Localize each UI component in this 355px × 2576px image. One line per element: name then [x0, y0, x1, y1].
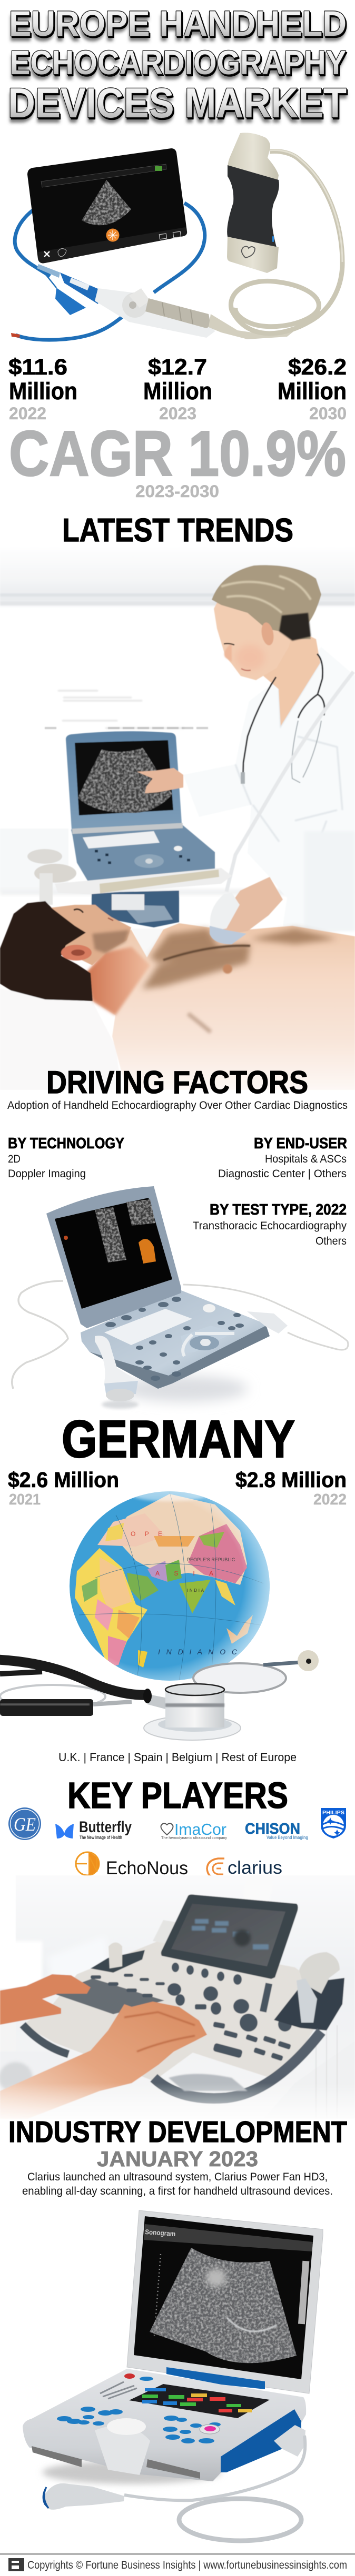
- image: handheld tablet ultrasound with probe and cable: [11, 133, 342, 340]
- console handle: [23, 2025, 321, 2098]
- globe: PEOPLE'S REPUBLIC: [187, 1557, 235, 1562]
- segment: by technology: 2D: [8, 1153, 21, 1165]
- tablet: [27, 148, 187, 263]
- device monitor: [127, 2210, 323, 2393]
- cart: [27, 849, 232, 927]
- globe: INDIA: [187, 1588, 204, 1593]
- segment: by technology: BY TECHNOLOGY: [8, 1135, 124, 1152]
- stat: Germany 2021: $2.6 Million: [8, 1468, 119, 1492]
- catheter handle: [37, 264, 215, 338]
- laptop probes: [95, 1311, 288, 1409]
- stat: 2030 market size: Million: [278, 378, 347, 405]
- segment: by test type: Transthoracic Echocardiography: [193, 1220, 347, 1232]
- operator right hand and arm: [0, 2002, 207, 2119]
- stat: 2023 market size: [143, 355, 212, 423]
- patient torso: [86, 923, 355, 1090]
- segment: by end-user: Diagnostic Center | Others: [218, 1168, 347, 1180]
- device buttons: [57, 2373, 221, 2443]
- globe: I N D I A N O C: [158, 1648, 238, 1656]
- globe: A S I A: [155, 1570, 213, 1577]
- stat: 2022 market size: [8, 355, 77, 423]
- ultrasound monitor: [66, 731, 183, 830]
- segment: by test type: [193, 1201, 347, 1247]
- logo: Fortune Business Insights: [8, 2558, 24, 2571]
- photo: doctor scanning patient with ultrasound cart: [0, 544, 355, 1090]
- logo: ImaCor: ImaCor: [174, 1820, 226, 1838]
- stat: Germany 2021: 2021: [9, 1491, 41, 1508]
- photo: hands operating ultrasound console: [0, 1875, 355, 2119]
- text: date: JANUARY 2023: [97, 2147, 258, 2171]
- device probe and cable: [43, 2436, 305, 2541]
- device side panel: [221, 2409, 305, 2472]
- segment: by technology: Doppler Imaging: [8, 1168, 86, 1180]
- handheld beige probe: [209, 133, 342, 339]
- text: development description: [22, 2171, 333, 2197]
- segment: by technology: [8, 1135, 124, 1180]
- logo: Butterfly: [55, 1819, 132, 1840]
- text: latest trends subtitle: Emergence of Ultrasound in Telehealth: [87, 549, 268, 561]
- stat: 2022 market size: Million: [9, 378, 77, 405]
- stat: 2030 market size: [278, 355, 347, 423]
- blue catheter cable: [11, 203, 205, 340]
- logo: EchoNous: [76, 1852, 188, 1878]
- logo: GE: GE: [14, 1814, 36, 1835]
- stat: 2022 market size: 2022: [9, 404, 46, 423]
- laptop cables: [12, 1281, 348, 1389]
- image: portable laptop ultrasound: [12, 1186, 348, 1409]
- stat: Germany 2022: $2.8 Million: [235, 1468, 347, 1492]
- logo: Butterfly: Butterfly: [79, 1819, 132, 1836]
- text: other European countries: U.K. | France | Spain | Belgium | Rest of Europe: [58, 1751, 297, 1764]
- console keyboard: [52, 1978, 164, 2014]
- stat: 2030 market size: 2030: [309, 404, 347, 423]
- stat: 2022 market size: $11.6: [8, 355, 67, 380]
- console knobs and buttons: [91, 1963, 292, 2061]
- logo: Clarius: clarius: [228, 1858, 282, 1878]
- patient pillow: [0, 928, 163, 1090]
- console touchscreen: [161, 1894, 298, 1979]
- image: globe with stethoscope: [0, 1489, 319, 1740]
- text: driving factors subtitle: Adoption of Handheld Echocardiography Over Other Cardiac Diagnostics: [7, 1099, 348, 1112]
- text: development description: enabling all-day scanning, a first for handheld ultrasound devices.: [22, 2185, 333, 2197]
- heading: Germany: GERMANY: [62, 1410, 295, 1469]
- operator left hand: [0, 1974, 91, 2025]
- globe: O P E: [131, 1530, 162, 1538]
- logo: ImaCor: The hemodynamic ultrasound company: [161, 1835, 227, 1840]
- text: development description: Clarius launched an ultrasound system, Clarius Power Fan HD3,: [27, 2171, 328, 2183]
- device monitor: Sonogram: [145, 2228, 176, 2238]
- logo: Chison: Value Beyond Imaging: [267, 1835, 308, 1841]
- room background: [0, 1875, 355, 2119]
- device colour display: [129, 2384, 270, 2418]
- segment: by end-user: [218, 1135, 347, 1180]
- laptop lid and screen: [46, 1186, 181, 1328]
- clinic background: [0, 544, 355, 895]
- device hinge: [166, 2367, 265, 2389]
- title: [8, 4, 347, 126]
- stat: 2030 market size: $26.2: [288, 355, 347, 380]
- segment: by end-user: Hospitals & ASCs: [265, 1153, 347, 1165]
- logo: Chison: CHISON: [245, 1821, 300, 1837]
- stat: 2023 market size: Million: [143, 378, 212, 405]
- image: portable sonogram device: [23, 2210, 323, 2541]
- heading: key players: KEY PLAYERS: [67, 1775, 288, 1816]
- logo: GE: [8, 1807, 41, 1840]
- device base: [23, 2369, 306, 2484]
- globe: [70, 1489, 270, 1681]
- console left probe holder: [91, 1942, 145, 1973]
- stethoscope: [0, 1650, 319, 1740]
- logo: Philips: [321, 1808, 346, 1838]
- doctor hand on probe: [210, 877, 283, 944]
- stat: Germany 2021: [8, 1468, 119, 1508]
- stat: 2023 market size: 2023: [159, 404, 196, 423]
- doctor coat: [183, 647, 355, 932]
- heading: driving factors: DRIVING FACTORS: [46, 1065, 308, 1100]
- logo: EchoNous: EchoNous: [106, 1858, 188, 1878]
- stat: Germany 2022: [235, 1468, 347, 1508]
- doctor head: [212, 565, 321, 726]
- logo: Butterfly: The New Image of Health: [80, 1835, 122, 1840]
- stethoscope on doctor: [226, 654, 353, 892]
- footer: [0, 2553, 355, 2571]
- stat: 2023 market size: $12.7: [148, 355, 207, 380]
- console right probe holder: [274, 1952, 344, 2031]
- segment: by test type: Others: [315, 1235, 347, 1247]
- ultrasound console keyboard: [71, 823, 215, 882]
- heading: latest trends: LATEST TRENDS: [62, 512, 293, 549]
- logo: Clarius: [207, 1858, 282, 1879]
- stat: CAGR: 2023-2030: [135, 482, 219, 501]
- patient head: [0, 901, 131, 1001]
- logo: Philips: PHILIPS: [322, 1810, 344, 1816]
- console body: [23, 1920, 319, 2081]
- laptop base: [81, 1290, 270, 1402]
- stat: Germany 2022: 2022: [313, 1491, 347, 1508]
